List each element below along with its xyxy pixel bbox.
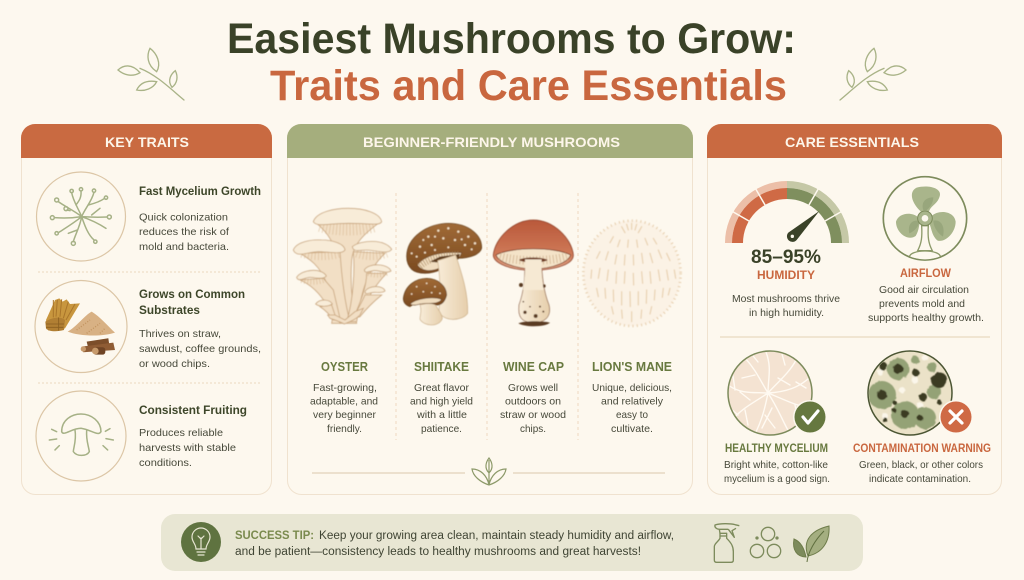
text: grows on common substrates: or wood chips.	[139, 358, 210, 370]
description: airflow: supports healthy growth.	[868, 312, 984, 324]
text: fast mycelium growth: mold and bacteria.	[139, 241, 229, 253]
description: oyster: adaptable, and	[310, 396, 378, 408]
description: lion's mane: Unique, delicious,	[592, 382, 672, 394]
description: oyster: friendly.	[327, 423, 362, 435]
description: healthy mycelium: mycelium is a good sign.	[724, 473, 830, 485]
text: fast mycelium growth	[139, 184, 261, 253]
description: wine cap: straw or wood	[500, 409, 566, 421]
description: wine cap	[500, 382, 566, 435]
description: shiitake: patience.	[421, 423, 462, 435]
text: success tip	[235, 528, 674, 558]
description: wine cap: chips.	[520, 423, 546, 435]
icon: right leaf sprig	[840, 48, 906, 100]
panel: care essentials	[707, 124, 1002, 494]
description: contamination warning: indicate contamination.	[869, 473, 971, 485]
text: fast mycelium growth: Fast Mycelium Growth	[139, 184, 261, 198]
description: lion's mane	[592, 382, 672, 435]
description: airflow: prevents mold and	[879, 298, 965, 310]
illustration: shiitake mushroom	[403, 223, 482, 325]
text: grows on common substrates: Substrates	[139, 303, 200, 317]
icon: left leaf sprig	[118, 48, 184, 100]
text: consistent fruiting: conditions.	[139, 457, 192, 469]
badge: warning cross	[939, 400, 973, 434]
description: oyster: Fast-growing,	[313, 382, 377, 394]
heading: beginner-friendly mushrooms: BEGINNER-FRIENDLY MUSHROOMS	[363, 134, 620, 150]
text: consistent fruiting: Produces reliable	[139, 427, 223, 439]
icon: fruiting mushroom	[36, 391, 126, 481]
mushroom name: oyster: OYSTER	[321, 360, 368, 374]
icon: fan	[883, 177, 967, 262]
text: consistent fruiting: Consistent Fruiting	[139, 403, 247, 417]
heading: key traits: KEY TRAITS	[105, 134, 189, 150]
description: wine cap: outdoors on	[505, 396, 561, 408]
description: shiitake: with a little	[416, 409, 467, 421]
image: healthy mycelium	[728, 351, 827, 435]
description: airflow: Good air circulation	[879, 284, 969, 296]
text: consistent fruiting: harvests with stable	[139, 442, 236, 454]
icon: leaf ornament	[472, 458, 506, 485]
label: contamination warning: CONTAMINATION WARNING	[853, 443, 991, 455]
description: airflow	[868, 284, 984, 324]
icon: spores	[750, 527, 781, 558]
mushroom name: lion's mane: LION'S MANE	[592, 360, 672, 374]
text: fast mycelium growth: Quick colonization	[139, 212, 228, 224]
label: airflow: AIRFLOW	[900, 268, 951, 280]
text: grows on common substrates: Thrives on straw,	[139, 328, 221, 340]
description: healthy mycelium	[724, 459, 830, 485]
heading: care essentials: CARE ESSENTIALS	[785, 134, 919, 150]
illustration: wine cap mushroom	[493, 220, 573, 326]
text: success tip: Keep your growing area clean, maintain steady humidity and airflow,	[319, 530, 674, 542]
description: lion's mane: easy to	[616, 409, 648, 421]
gauge: humidity	[728, 184, 846, 243]
description: lion's mane: and relatively	[601, 396, 664, 408]
label: healthy mycelium: HEALTHY MYCELIUM	[725, 443, 828, 455]
mushroom name: wine cap: WINE CAP	[503, 360, 564, 374]
text: success tip: SUCCESS TIP:	[235, 528, 314, 542]
icon: mycelium network	[36, 172, 126, 261]
image: contaminated culture	[865, 351, 973, 435]
description: wine cap: Grows well	[508, 382, 558, 394]
description: shiitake: and high yield	[410, 396, 473, 408]
text: grows on common substrates: Grows on Common	[139, 287, 245, 301]
icon: straw, sawdust and wood chips	[35, 280, 127, 372]
text: fast mycelium growth: reduces the risk of	[139, 226, 229, 238]
title: Traits and Care Essentials	[270, 62, 787, 110]
mushroom name: shiitake: SHIITAKE	[414, 360, 469, 374]
title	[227, 15, 796, 110]
description: healthy mycelium: Bright white, cotton-like	[724, 459, 828, 471]
text: success tip: and be patient—consistency leads to healthy mushrooms and great harvests!	[235, 546, 641, 558]
icon: leaf	[794, 526, 829, 562]
description: oyster	[310, 382, 378, 435]
illustration: lion's mane mushroom	[583, 221, 681, 326]
value: humidity range: 85–95%	[751, 247, 821, 268]
description: shiitake	[410, 382, 473, 435]
title: Easiest Mushrooms to Grow:	[227, 15, 796, 63]
description: humidity: in high humidity.	[749, 307, 824, 319]
callout: success tip	[161, 514, 863, 571]
description: shiitake: Great flavor	[414, 382, 469, 394]
description: humidity	[732, 293, 840, 319]
icon: spray bottle	[714, 524, 739, 562]
description: humidity: Most mushrooms thrive	[732, 293, 840, 305]
description: contamination warning: Green, black, or other colors	[859, 459, 983, 471]
icon: light bulb	[181, 522, 221, 562]
text: consistent fruiting	[139, 403, 247, 469]
description: lion's mane: cultivate.	[611, 423, 653, 435]
badge: check	[793, 400, 827, 434]
description: contamination warning	[859, 459, 983, 485]
panel: beginner-friendly mushrooms	[287, 124, 693, 494]
illustration: oyster mushroom	[293, 208, 392, 324]
description: oyster: very beginner	[313, 409, 376, 421]
text: grows on common substrates	[139, 287, 261, 370]
panel: key traits	[21, 124, 272, 494]
label: humidity: HUMIDITY	[757, 270, 815, 282]
text: grows on common substrates: sawdust, coffee grounds,	[139, 343, 261, 355]
